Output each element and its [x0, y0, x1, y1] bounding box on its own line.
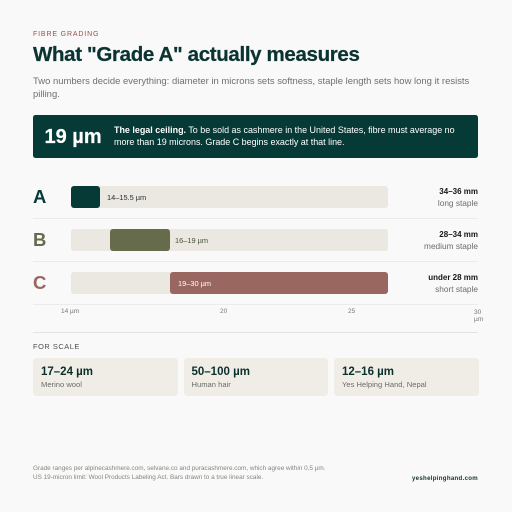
row: grade B [33, 228, 478, 251]
grade letter C: C [33, 272, 46, 292]
card: human hair [184, 358, 328, 396]
card: yes helping hand [334, 358, 478, 396]
heading: for scale: FOR SCALE [33, 342, 80, 351]
row: grade A [33, 186, 478, 208]
staple length C: under 28 mm [428, 273, 478, 282]
callout figure: 19 µm [44, 126, 102, 148]
eyebrow: fibre grading: FIBRE GRADING [33, 31, 99, 38]
label: Yes Helping Hand, Nepal [342, 380, 427, 388]
track B [70, 229, 388, 250]
website credit: yeshelpinghand.com [412, 474, 478, 482]
title: What "Grade A" actually measures [33, 43, 360, 66]
label: Human hair [192, 380, 231, 388]
track C [70, 272, 388, 294]
staple type C: short staple [435, 284, 478, 294]
subtitle: pilling. [33, 89, 60, 100]
bar label B: 16–19 µm [175, 236, 208, 244]
footnote: US 19-micron limit: Wool Products Labeling Act. Bars drawn to a true linear scale. [33, 474, 263, 480]
subtitle [33, 76, 469, 100]
footnote [33, 465, 325, 480]
callout text: The legal ceiling. To be sold as cashmere in the United States, fibre must average no [114, 125, 455, 135]
row: grade C [33, 272, 478, 294]
callout text [114, 125, 455, 147]
axis tick: 30 [474, 309, 483, 323]
bar A [70, 186, 100, 208]
label: Merino wool [41, 380, 82, 388]
grade letter B: B [33, 228, 46, 250]
callout text: more than 19 microns. Grade C begins exactly at that line. [114, 137, 345, 147]
staple type A: long staple [438, 198, 478, 208]
callout: legal ceiling [33, 115, 478, 158]
axis tick: 30: 30 [474, 309, 481, 316]
bar label C: 19–30 µm [178, 278, 211, 288]
axis tick: 25: 25 [348, 308, 355, 315]
track A [70, 186, 388, 208]
chart: grade ranges [33, 186, 483, 323]
subtitle: Two numbers decide everything: diameter in microns sets softness, staple length sets how long it resists [33, 76, 469, 87]
staple type B: medium staple [424, 241, 478, 251]
bar label A: 14–15.5 µm [107, 192, 146, 202]
axis tick: 14: 14 µm [61, 308, 79, 315]
grade letter A: A [33, 186, 46, 207]
axis tick: 30: µm [474, 316, 483, 323]
staple length B: 28–34 mm [439, 230, 478, 239]
card: merino wool [33, 358, 178, 396]
bar C [170, 272, 388, 294]
value: 12–16 µm [342, 366, 394, 378]
footnote: Grade ranges per alpinecashmere.com, selvane.co and puracashmere.com, which agree within 0.5 µm. [33, 465, 325, 472]
value: 17–24 µm [41, 366, 93, 378]
staple length A: 34–36 mm [439, 187, 478, 196]
bar B [110, 229, 170, 250]
axis tick: 20: 20 [220, 308, 227, 315]
value: 50–100 µm [192, 366, 250, 378]
